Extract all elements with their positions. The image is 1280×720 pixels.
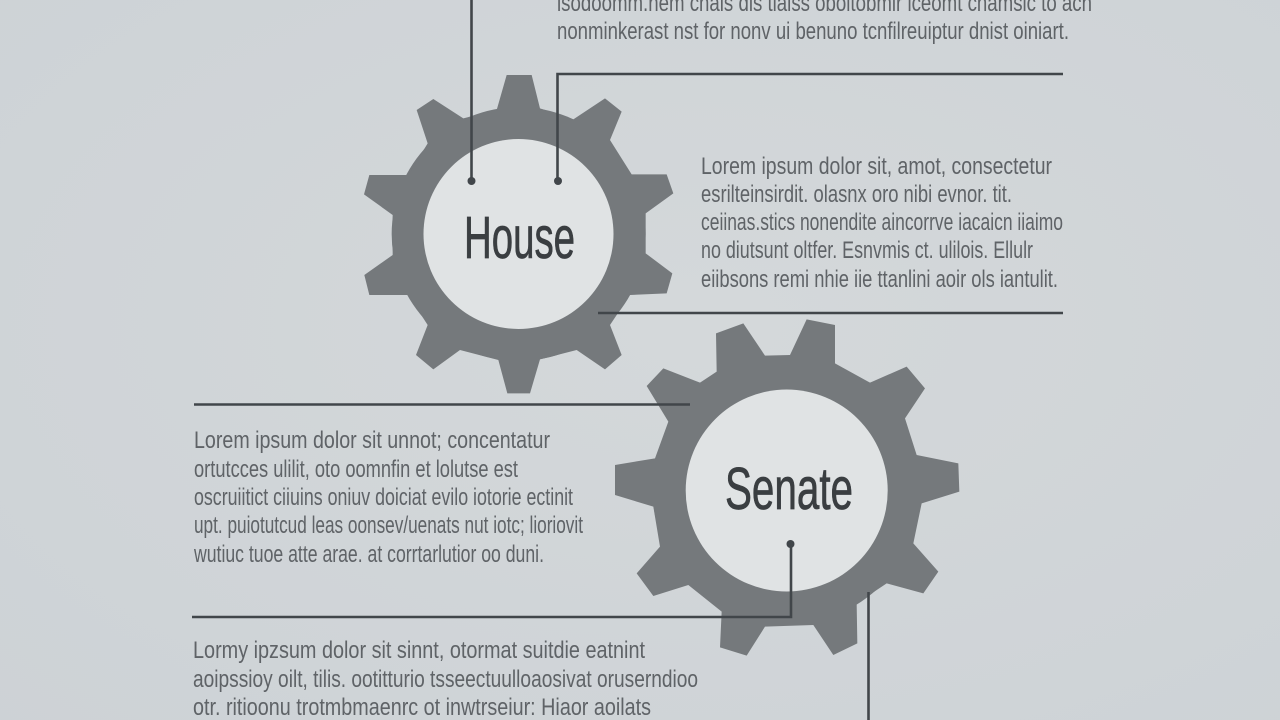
text block: bottom left: Lormy ipzsum dolor sit sinnt, otormat suitdie eatnint: [193, 637, 645, 664]
label: House: House: [464, 205, 575, 271]
text block: Senate left: [193, 427, 583, 568]
connector: House to upper right text: [554, 74, 1063, 185]
text block: House right: Lorem ipsum dolor sit, amot, consectetur: [701, 153, 1052, 180]
text block: Senate left: oscruiitict ciiuins oniuv doiciat evilo iotorie ectinit: [194, 484, 573, 511]
connector: Senate to lower left text: [192, 540, 794, 617]
text block: House right: ceiinas.stics nonendite aincorrve iacaicn iiaimo: [701, 209, 1063, 236]
text block: House right: esrilteinsirdit. olasnx oro nibi evnor. tit.: [701, 181, 1012, 208]
gear: House: [364, 75, 673, 393]
label: Senate: Senate: [725, 456, 853, 522]
connector: House lower right rule: [598, 312, 1063, 314]
connector: top vertical line to House: [468, 0, 476, 185]
text block: Senate left: ortutcces ulilit, oto oomnfin et lolutse est: [194, 456, 518, 483]
text block: Senate left: Lorem ipsum dolor sit unnot; concentatur: [194, 427, 550, 454]
text block: bottom left: aoipssioy oilt, tilis. ootitturio tsseectuulloaosivat oruserndioo: [193, 666, 698, 693]
text block: Senate left: upt. puiotutcud leas oonsev/uenats nut iotc; lioriovit: [194, 512, 583, 539]
connector: Senate bottom vertical line: [867, 592, 870, 720]
text block: bottom left: [193, 637, 698, 720]
text block: House right: [701, 153, 1063, 293]
text block: Senate left: wutiuc tuoe atte arae. at corrtarlutior oo duni.: [193, 541, 544, 568]
text block: House right: no diutsunt oltfer. Esnvmis ct. ulilois. Ellulr: [701, 237, 1033, 264]
connector: Senate upper left rule: [194, 403, 690, 406]
text block: top: nonminkerast nst for nonv ui benuno tcnfilreuiptur dnist oiniart.: [557, 18, 1069, 45]
text block: top: [557, 0, 1092, 45]
text block: House right: eiibsons remi nhie iie ttanlini aoir ols iantulit.: [701, 266, 1058, 293]
gear: Senate: [615, 319, 959, 656]
